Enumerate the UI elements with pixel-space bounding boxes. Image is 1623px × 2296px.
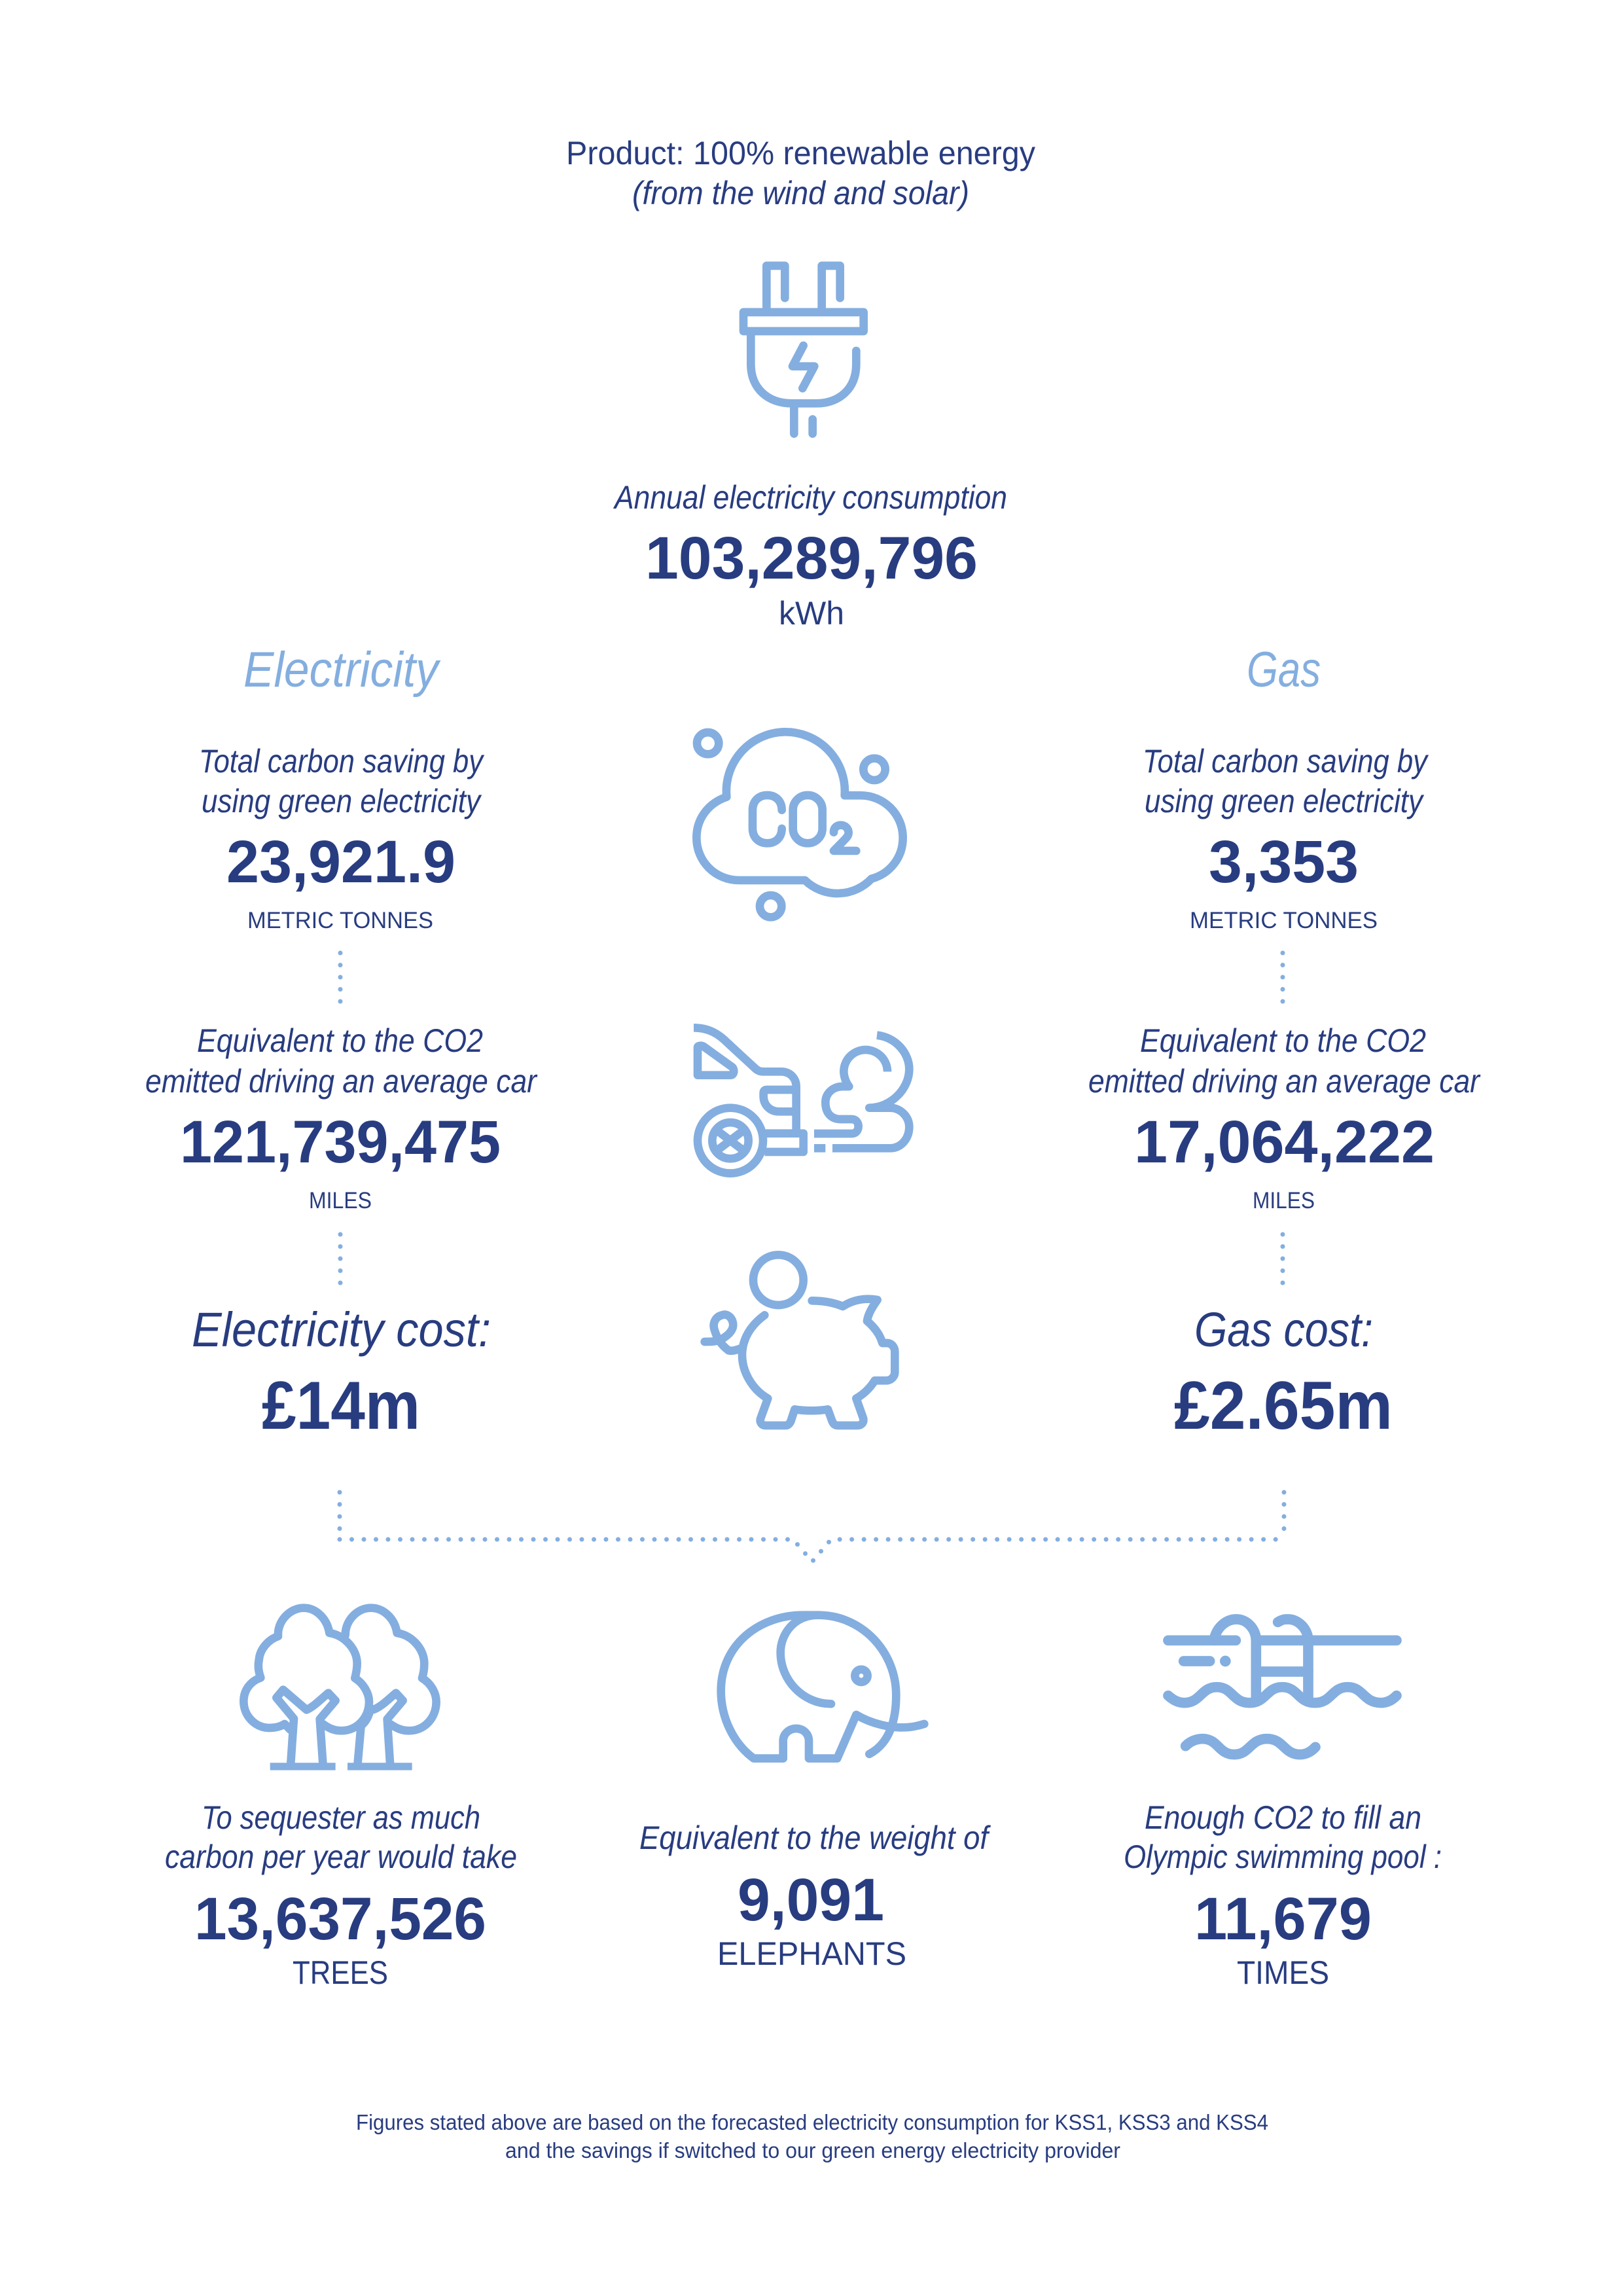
text: swimming pools: TIMES <box>1237 1954 1329 1991</box>
text: electricity car equivalent: 121,739,475 <box>180 1109 501 1175</box>
heading: gas: Gas <box>1247 642 1321 698</box>
text: swimming pools: Olympic swimming pool : <box>1124 1839 1442 1875</box>
text: elephants <box>639 1820 991 1972</box>
text: gas carbon saving: Total carbon saving by <box>1143 743 1429 780</box>
footnote <box>356 2110 1268 2162</box>
text: gas cost <box>1174 1302 1393 1444</box>
panel: electricity column <box>145 642 538 1444</box>
text: electricity cost: £14m <box>262 1368 420 1444</box>
text: electricity carbon saving: 23,921.9 <box>226 829 455 895</box>
panel: product header: (from the wind and solar) <box>632 175 969 211</box>
icon: trees <box>243 1608 437 1770</box>
text: electricity car equivalent <box>145 1022 538 1213</box>
text: gas car equivalent: Equivalent to the CO2 <box>1140 1022 1426 1059</box>
heading: electricity: Electricity <box>243 642 441 698</box>
panel: annual consumption: 103,289,796 <box>645 525 978 592</box>
text: elephants: 9,091 <box>738 1867 884 1933</box>
text: gas carbon saving: using green electricity <box>1145 783 1425 819</box>
icon: electric plug <box>743 266 864 434</box>
text: trees: To sequester as much <box>202 1799 480 1836</box>
text: electricity carbon saving: Total carbon saving by <box>199 743 485 780</box>
text: trees: carbon per year would take <box>165 1839 517 1875</box>
text: electricity cost <box>192 1302 491 1444</box>
footnote: Figures stated above are based on the forecasted electricity consumption for KSS1, KSS3 and KSS4 <box>356 2110 1268 2134</box>
text: gas car equivalent <box>1088 1022 1481 1213</box>
text: gas carbon saving: METRIC TONNES <box>1190 908 1378 933</box>
text: electricity car equivalent: emitted driving an average car <box>145 1063 538 1100</box>
text: swimming pools: 11,679 <box>1194 1886 1372 1952</box>
text: gas cost: Gas cost: <box>1194 1302 1373 1357</box>
panel: annual consumption: kWh <box>779 595 844 632</box>
connector: dotted lines to totals <box>340 1492 1284 1562</box>
text: electricity carbon saving <box>199 743 485 933</box>
icon: car exhaust <box>694 1028 909 1174</box>
panel: product header <box>566 135 1035 211</box>
icon: swimming pool <box>1168 1619 1397 1755</box>
text: gas car equivalent: MILES <box>1253 1188 1315 1213</box>
text: electricity carbon saving: using green electricity <box>202 783 482 819</box>
icon: CO2 cloud <box>696 732 903 917</box>
panel: gas column <box>1088 642 1481 1444</box>
panel: trees <box>165 1608 517 1991</box>
icon: piggy bank <box>705 1255 895 1426</box>
text: trees <box>165 1799 517 1991</box>
panel: product header: Product: 100% renewable energy <box>566 135 1035 171</box>
text: electricity car equivalent: MILES <box>309 1188 372 1213</box>
text: gas carbon saving: 3,353 <box>1209 829 1359 895</box>
footnote: and the savings if switched to our green energy electricity provider <box>505 2138 1120 2162</box>
text: electricity car equivalent: Equivalent to the CO2 <box>197 1022 483 1059</box>
text: gas car equivalent: emitted driving an average car <box>1088 1063 1481 1100</box>
text: electricity cost: Electricity cost: <box>192 1302 491 1357</box>
panel: annual consumption <box>613 479 1007 632</box>
text: gas car equivalent: 17,064,222 <box>1134 1109 1435 1175</box>
text: swimming pools: Enough CO2 to fill an <box>1145 1799 1421 1836</box>
text: trees: 13,637,526 <box>194 1886 486 1952</box>
text: trees: TREES <box>293 1954 388 1991</box>
text: electricity carbon saving: METRIC TONNES <box>247 908 433 933</box>
text: gas cost: £2.65m <box>1174 1368 1393 1444</box>
panel: swimming pools <box>1124 1619 1442 1991</box>
text: elephants: Equivalent to the weight of <box>639 1820 991 1856</box>
panel: annual consumption: Annual electricity consumption <box>613 479 1007 516</box>
icon: elephant <box>721 1615 924 1759</box>
text: swimming pools <box>1124 1799 1442 1991</box>
text: gas carbon saving <box>1143 743 1429 933</box>
panel: elephants <box>639 1615 991 1972</box>
text: elephants: ELEPHANTS <box>717 1935 906 1972</box>
